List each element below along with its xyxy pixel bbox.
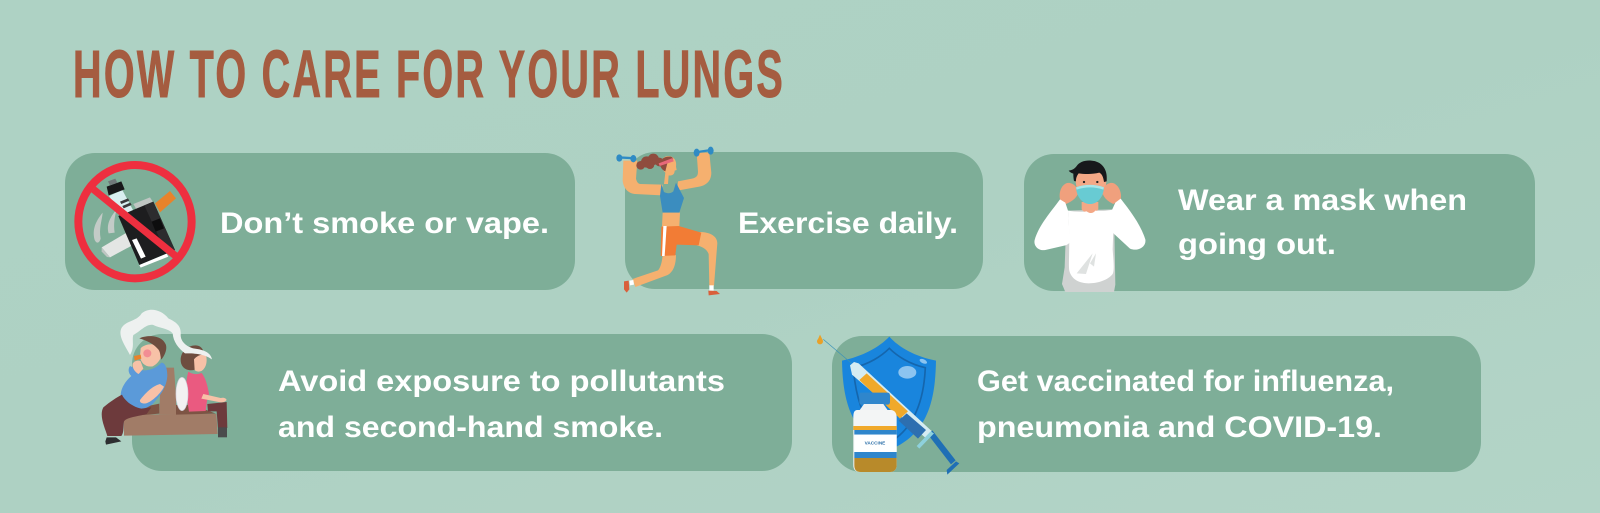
panel: exercise daily xyxy=(616,147,983,295)
label: get vaccinated: Get vaccinated for influenza, xyxy=(977,365,1394,398)
smoke plume xyxy=(120,310,212,359)
label: don't smoke or vape: Don’t smoke or vape. xyxy=(220,207,549,240)
label: get vaccinated xyxy=(977,365,1394,444)
label: avoid pollutants: Avoid exposure to pollutants xyxy=(278,365,725,398)
icon: vaccine, syringe and shield: VACCINE xyxy=(865,441,885,446)
panel: get vaccinated xyxy=(817,335,1481,475)
icon: woman exercising with dumbbells xyxy=(616,147,720,295)
icon: no smoking or vaping xyxy=(78,165,192,278)
title: HOW TO CARE FOR YOUR LUNGS xyxy=(73,36,783,112)
label: wear a mask: going out. xyxy=(1178,228,1336,261)
panel: don't smoke or vape xyxy=(65,153,575,290)
panel: avoid pollutants xyxy=(102,310,792,471)
icon: man putting on a face mask xyxy=(1034,161,1145,292)
label: avoid pollutants: and second-hand smoke. xyxy=(278,411,663,444)
panel: wear a mask xyxy=(1024,154,1535,292)
label: wear a mask: Wear a mask when xyxy=(1178,184,1467,217)
label: get vaccinated: pneumonia and COVID-19. xyxy=(977,411,1382,444)
icon: people exposed to second-hand smoke on a bench xyxy=(102,310,227,445)
label: wear a mask xyxy=(1178,184,1467,261)
hair bun xyxy=(636,154,664,170)
icon: vaccine, syringe and shield xyxy=(817,335,959,475)
label: avoid pollutants xyxy=(278,365,725,444)
label: exercise daily: Exercise daily. xyxy=(738,207,958,240)
